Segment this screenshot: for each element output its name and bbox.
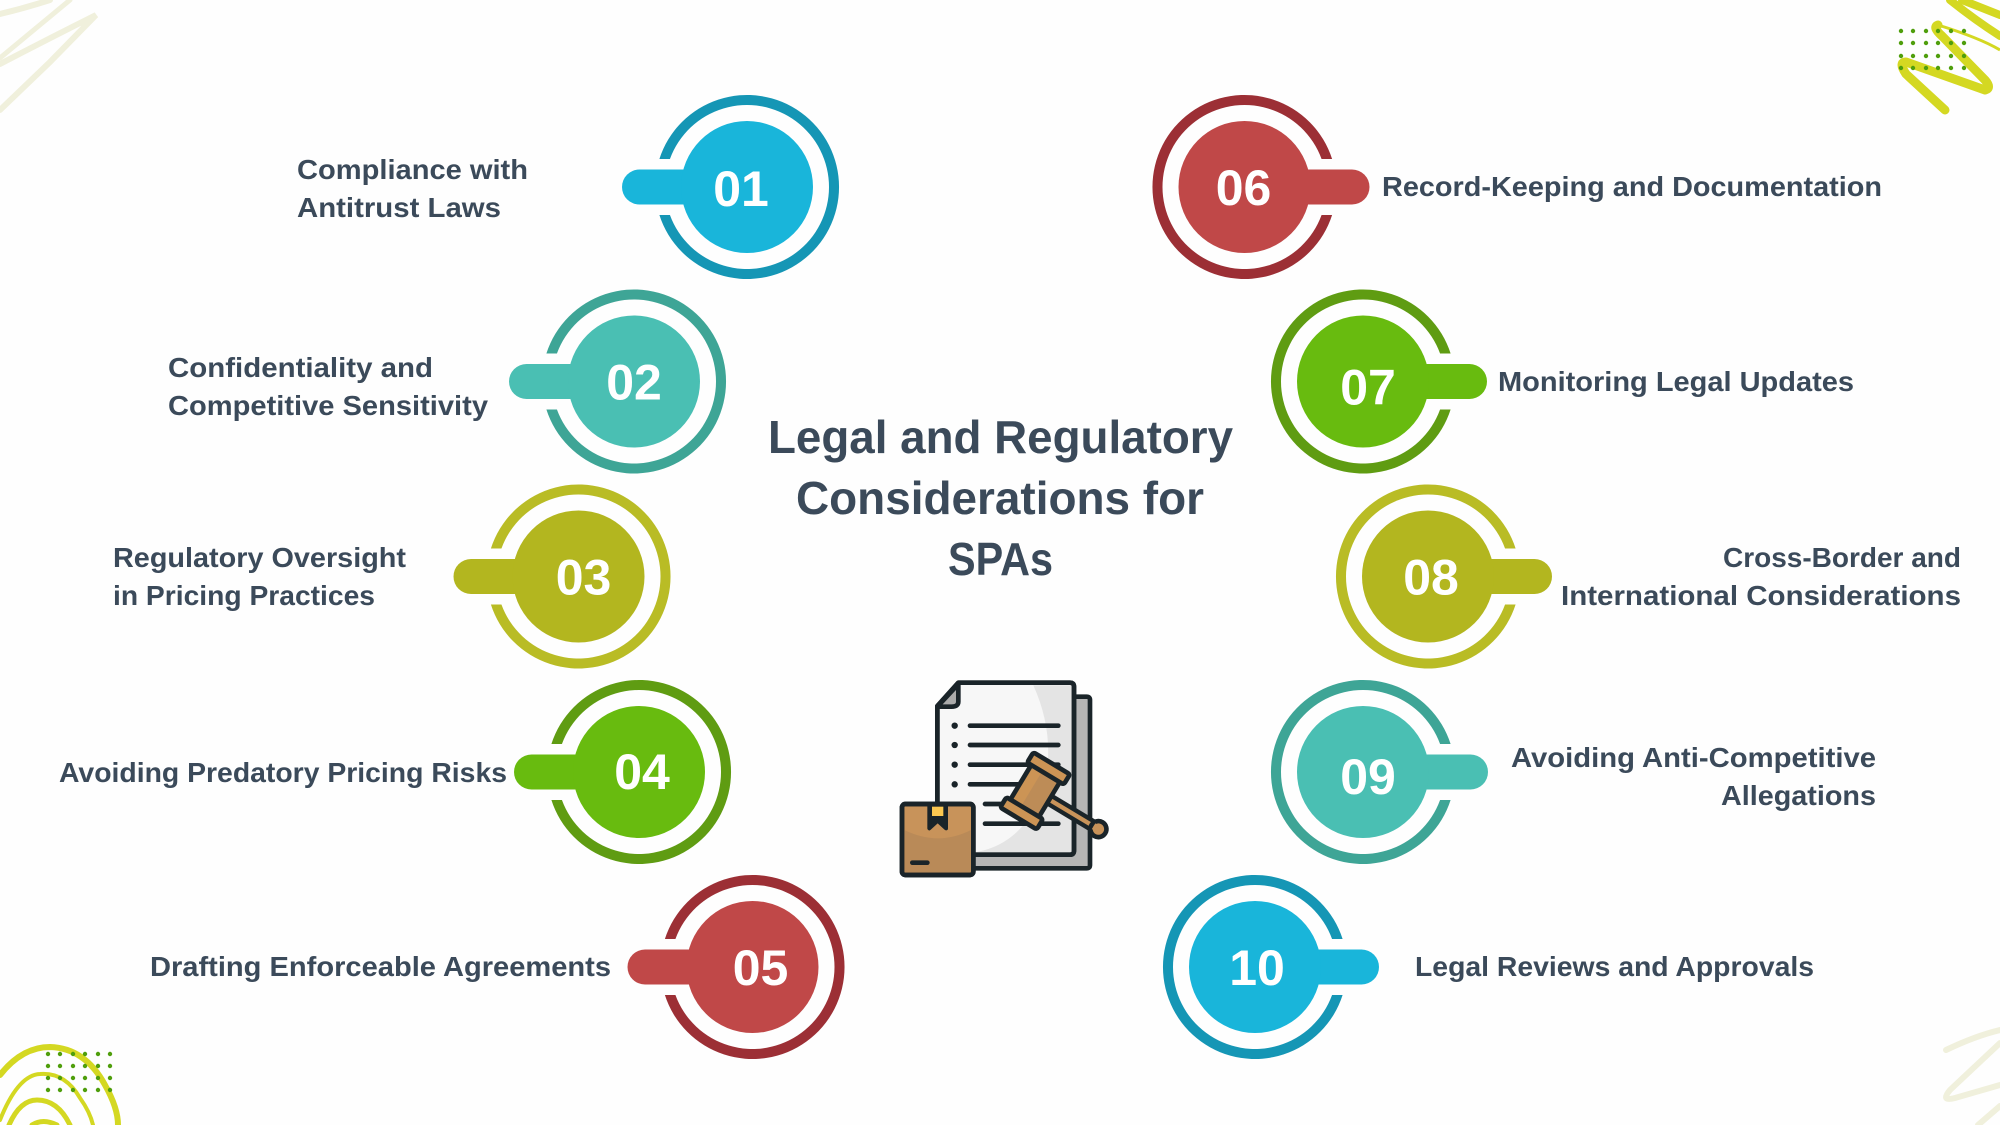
- icon: document, box and gavel: [902, 683, 1122, 875]
- title: Legal and Regulatory: [768, 411, 1233, 463]
- step 02 label: Competitive Sensitivity: [168, 390, 488, 421]
- step 01 label: Antitrust Laws: [297, 192, 501, 223]
- step 04 badge: 04: [614, 744, 670, 800]
- step 03 label: [113, 542, 406, 611]
- step 02 label: [168, 352, 488, 421]
- step 02 label: Confidentiality and: [168, 352, 433, 383]
- step 08 badge: 08: [1403, 550, 1459, 606]
- step 06 label: Record-Keeping and Documentation: [1382, 171, 1882, 202]
- step 10 badge: 10: [1229, 940, 1285, 996]
- step 01 label: [297, 154, 528, 223]
- step 06 badge: 06: [1216, 160, 1271, 216]
- step 07 label: Monitoring Legal Updates: [1498, 366, 1854, 397]
- step 01 badge: 01: [713, 161, 769, 217]
- step 03 label: Regulatory Oversight: [113, 542, 406, 573]
- step 01 label: Compliance with: [297, 154, 528, 185]
- step 07 badge: 07: [1340, 360, 1396, 416]
- step 08 label: [1561, 542, 1961, 611]
- step 01 badge: [622, 95, 839, 279]
- step 03 label: in Pricing Practices: [113, 580, 375, 611]
- step 04 label: Avoiding Predatory Pricing Risks: [59, 757, 507, 788]
- step 05 badge: [628, 875, 845, 1059]
- step 09 label: Allegations: [1721, 780, 1876, 811]
- step 09 badge: [1271, 680, 1488, 864]
- step 10 label: Legal Reviews and Approvals: [1415, 951, 1814, 982]
- step 08 label: Cross-Border and: [1723, 542, 1961, 573]
- decoration: bottom-right scribble: [1946, 1030, 2000, 1125]
- step 07 badge: [1271, 290, 1487, 474]
- step 09 label: Avoiding Anti-Competitive: [1511, 742, 1876, 773]
- step 02 badge: 02: [606, 354, 662, 410]
- decoration: bottom-left scribble and dots: [0, 1047, 118, 1125]
- title: Considerations for: [796, 472, 1204, 524]
- title: SPAs: [948, 533, 1053, 585]
- step 10 badge: [1163, 875, 1379, 1059]
- step 06 badge: [1152, 95, 1370, 279]
- decoration: top-left scribble: [0, 0, 96, 110]
- step 08 label: International Considerations: [1561, 580, 1961, 611]
- step 03 badge: 03: [556, 550, 611, 606]
- title: [768, 411, 1233, 585]
- step 05 label: Drafting Enforceable Agreements: [150, 951, 611, 982]
- step 09 badge: 09: [1340, 749, 1396, 805]
- step 09 label: [1511, 742, 1876, 811]
- decoration: top-right scribble and dots: [1899, 0, 2000, 110]
- step 05 badge: 05: [733, 940, 788, 996]
- step 03 badge: [454, 484, 671, 668]
- step 08 badge: [1336, 484, 1552, 668]
- step 04 badge: [514, 680, 731, 864]
- step 02 badge: [509, 290, 726, 474]
